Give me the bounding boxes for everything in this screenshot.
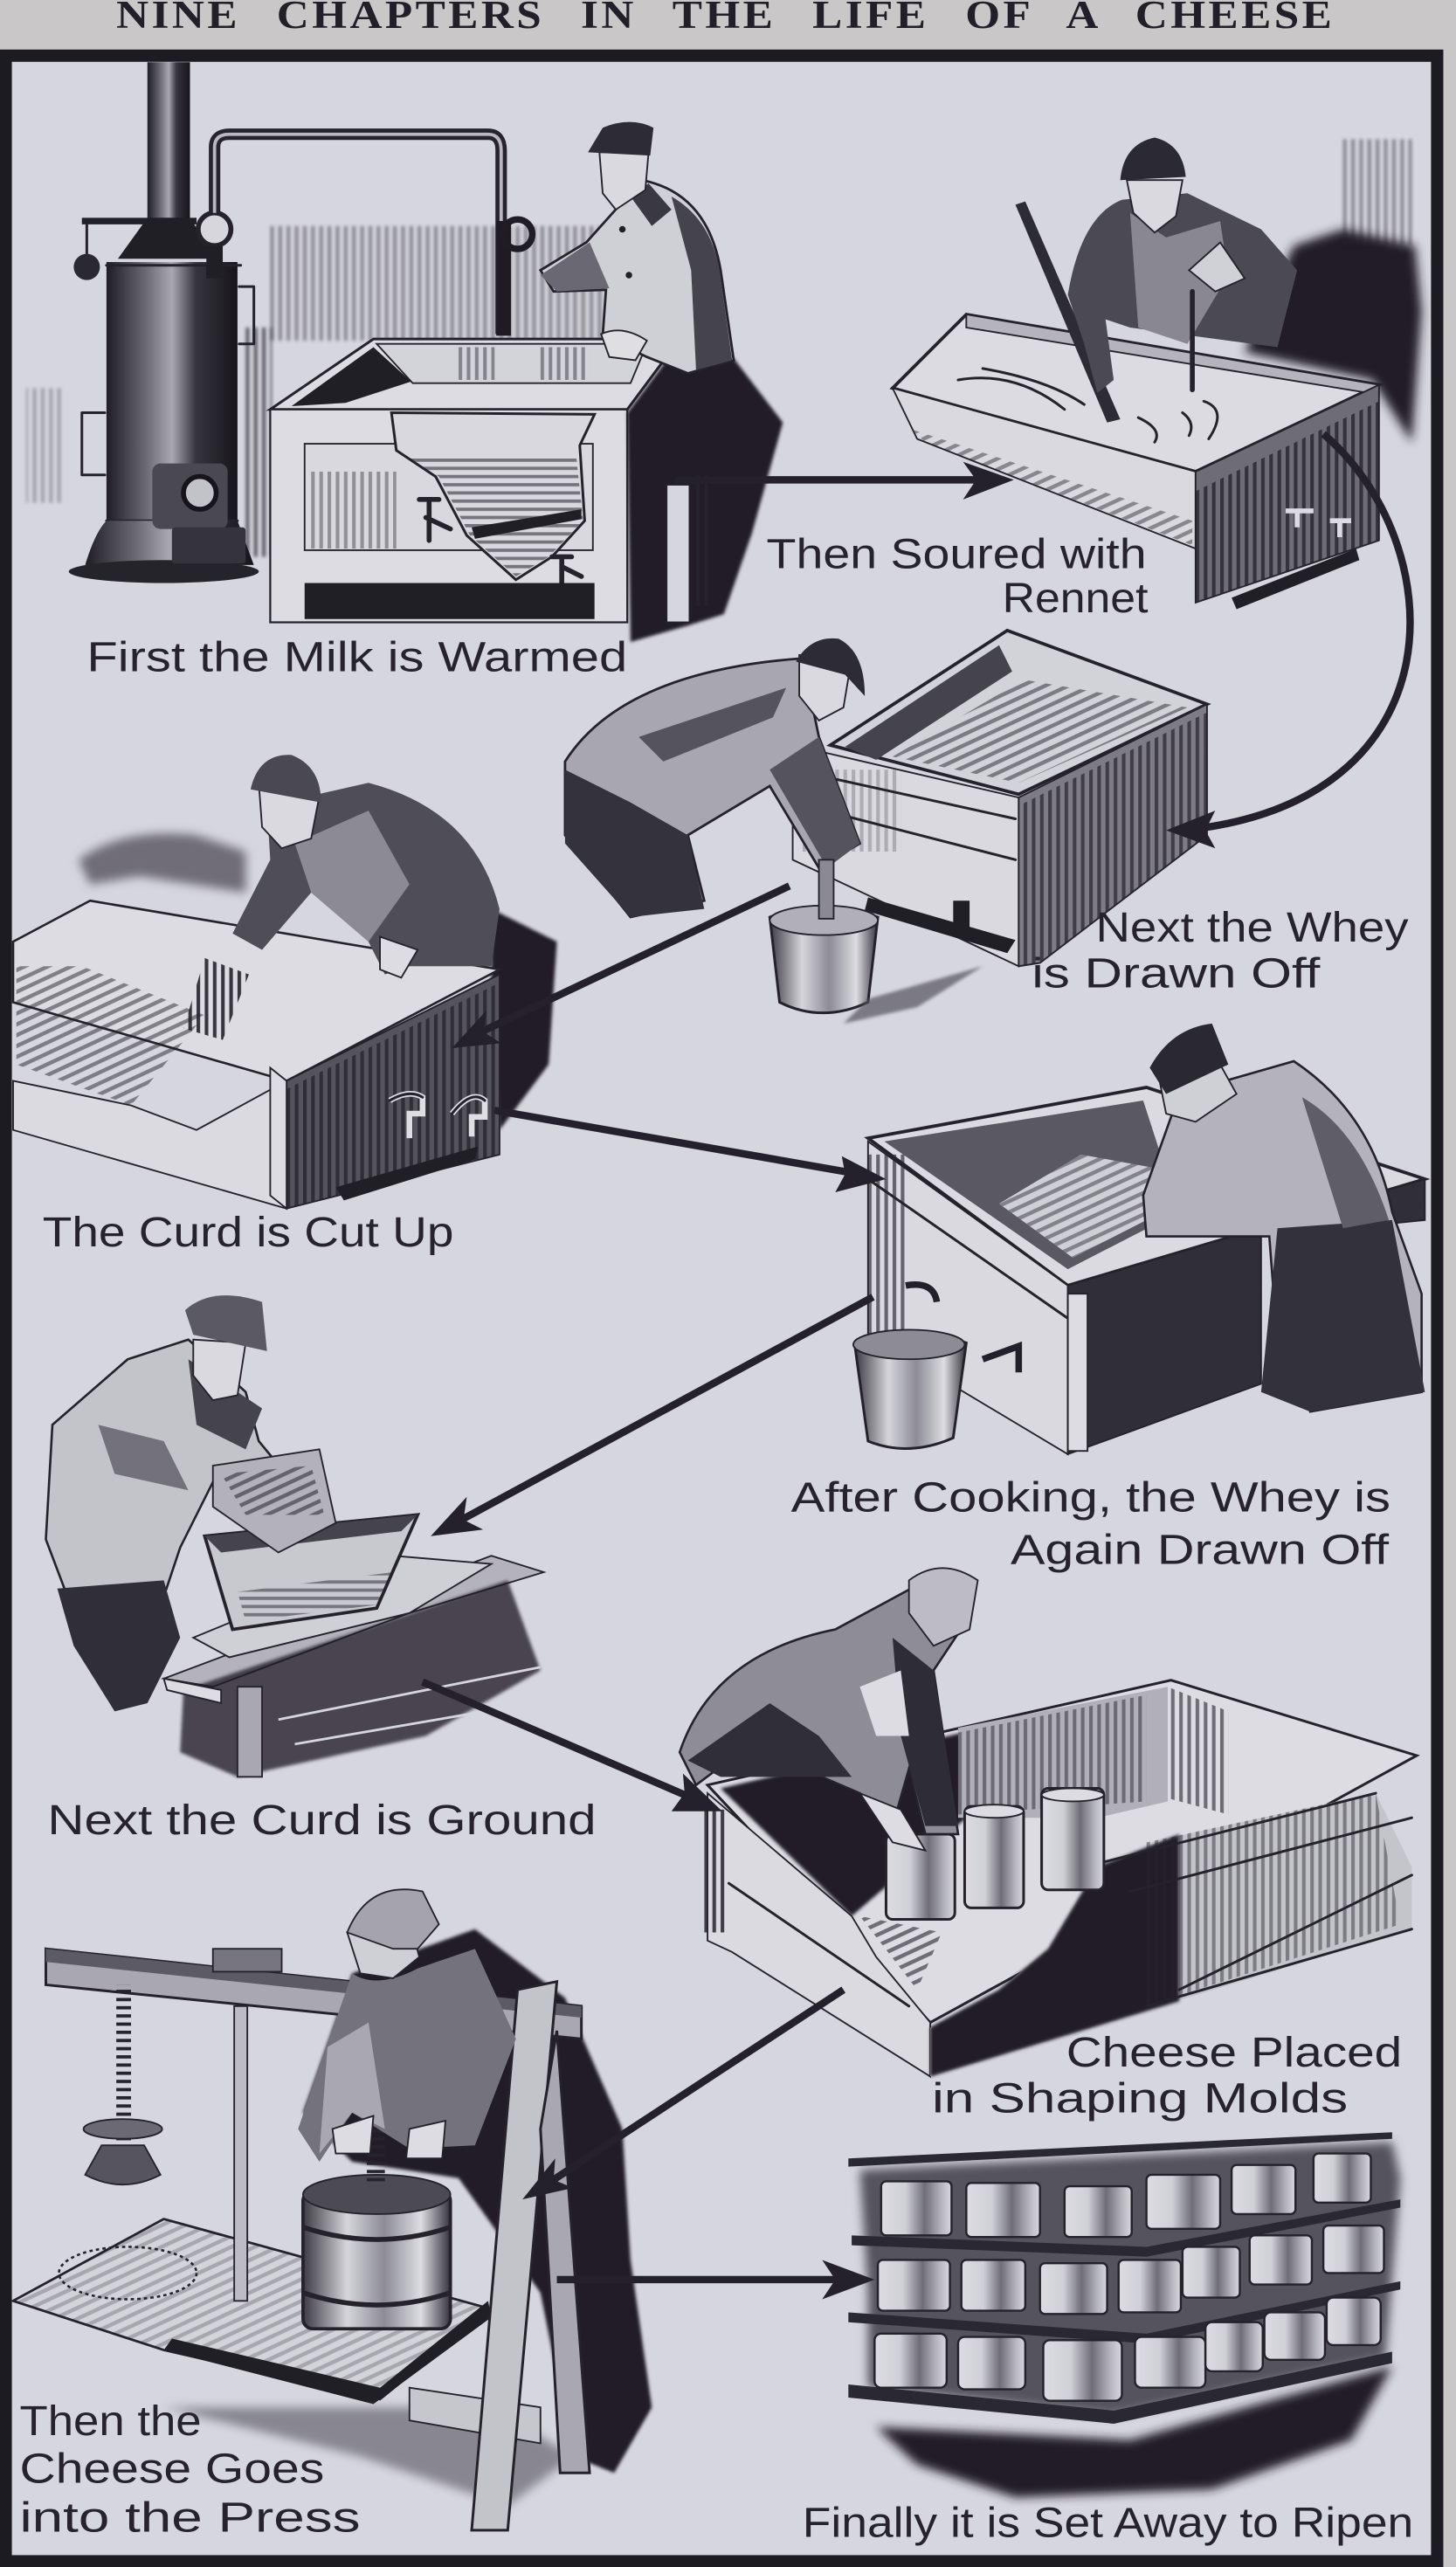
arrow 7	[522, 1990, 844, 2199]
dark shading behind shelves	[859, 2142, 1400, 2416]
shelves	[848, 2132, 1400, 2424]
hopper grinder	[193, 1515, 492, 1657]
scene 5: cooking, whey again drawn off	[853, 1024, 1425, 1454]
curd knife	[183, 958, 249, 1040]
caption: Cheese Placed in Shaping Molds	[932, 2030, 1402, 2122]
caption: Then the Cheese Goes into the Press	[20, 2398, 361, 2542]
caption: Then Soured with Rennet: Then Soured with	[767, 532, 1147, 578]
background hatching	[26, 226, 623, 556]
caption: Then the Cheese Goes into the Press: Then the	[20, 2398, 202, 2445]
vat	[13, 901, 500, 1209]
caption: Then the Cheese Goes into the Press: Cheese Goes	[20, 2446, 324, 2492]
worker looking in vat	[1143, 1024, 1425, 1411]
icon: boiler	[69, 62, 259, 583]
caption: Then Soured with Rennet	[767, 532, 1148, 622]
bucket	[769, 859, 983, 1024]
arrow 5	[431, 1297, 873, 1536]
arrow 8	[557, 2260, 874, 2299]
press frame	[46, 1949, 590, 2530]
dark backdrop	[492, 909, 557, 1130]
vat	[893, 314, 1379, 609]
vat	[868, 1087, 1425, 1454]
scene 2: soured with rennet	[893, 137, 1422, 609]
shadow under shelves	[876, 2366, 1392, 2497]
worker at press	[298, 1889, 516, 2162]
caption: Then Soured with Rennet: Rennet	[1003, 576, 1148, 622]
steam pipe	[215, 135, 532, 335]
cheese drum	[303, 2023, 451, 2329]
caption: Then the Cheese Goes into the Press: into the Press	[20, 2495, 361, 2542]
caption: First the Milk is Warmed: First the Milk is Warmed	[86, 635, 627, 681]
shaping molds	[886, 1788, 1104, 1919]
worker pouring rennet	[1068, 137, 1297, 393]
caption: After Cooking, the Whey is Again Drawn Off: Again Drawn Off	[1011, 1528, 1390, 1574]
arrow 4	[494, 1110, 886, 1192]
cheese wheels row 3	[874, 2298, 1381, 2401]
vat	[793, 631, 1207, 966]
cheese wheels row 1	[881, 2154, 1370, 2237]
caption: Next the Whey is Drawn Off	[1032, 905, 1409, 997]
scene 6: curd ground	[46, 1295, 544, 1777]
caption: Finally it is Set Away to Ripen: Finally it is Set Away to Ripen	[803, 2500, 1413, 2546]
worker cutting curd	[232, 755, 500, 977]
caption: After Cooking, the Whey is Again Drawn Off	[791, 1475, 1390, 1574]
press table	[13, 2219, 573, 2506]
scene 4: curd cut up	[13, 755, 557, 1209]
worker bending	[565, 638, 865, 917]
caption: Cheese Placed in Shaping Molds: in Shaping Molds	[932, 2076, 1348, 2122]
curved arrow 2	[1166, 434, 1410, 848]
caption: The Curd is Cut Up: The Curd is Cut Up	[43, 1210, 453, 1256]
arrow 3	[452, 886, 790, 1048]
dark backdrop	[1245, 139, 1422, 442]
dark worker body and shadow	[303, 1929, 652, 2473]
worker bending over molds	[680, 1568, 977, 1851]
scene 3: whey drawn off	[565, 631, 1207, 1024]
caption: Cheese Placed in Shaping Molds: Cheese Placed	[1066, 2030, 1402, 2076]
vat	[704, 1680, 1417, 2076]
caption: Next the Curd is Ground: Next the Curd is Ground	[47, 1798, 597, 1844]
cheese wheels row 2	[878, 2225, 1384, 2314]
worker at vat	[541, 122, 734, 373]
table	[164, 1556, 544, 1777]
scene 1: milk warmed	[26, 62, 783, 642]
arrow 6	[423, 1682, 722, 1811]
worker pouring curd	[46, 1295, 335, 1711]
caption: After Cooking, the Whey is Again Drawn Off: After Cooking, the Whey is	[791, 1475, 1390, 1522]
scene 9: ripening shelves	[848, 2132, 1400, 2497]
arrow 1	[675, 462, 1014, 500]
background cloud shading	[79, 833, 245, 893]
scene 7: shaping molds	[680, 1568, 1417, 2076]
bucket	[853, 1329, 966, 1448]
scene 8: cheese press	[13, 1889, 652, 2530]
paddle	[1016, 202, 1121, 423]
caption: Next the Whey is Drawn Off: is Drawn Off	[1032, 951, 1321, 997]
vat	[270, 339, 783, 642]
caption: Next the Whey is Drawn Off: Next the Whey	[1095, 905, 1409, 951]
